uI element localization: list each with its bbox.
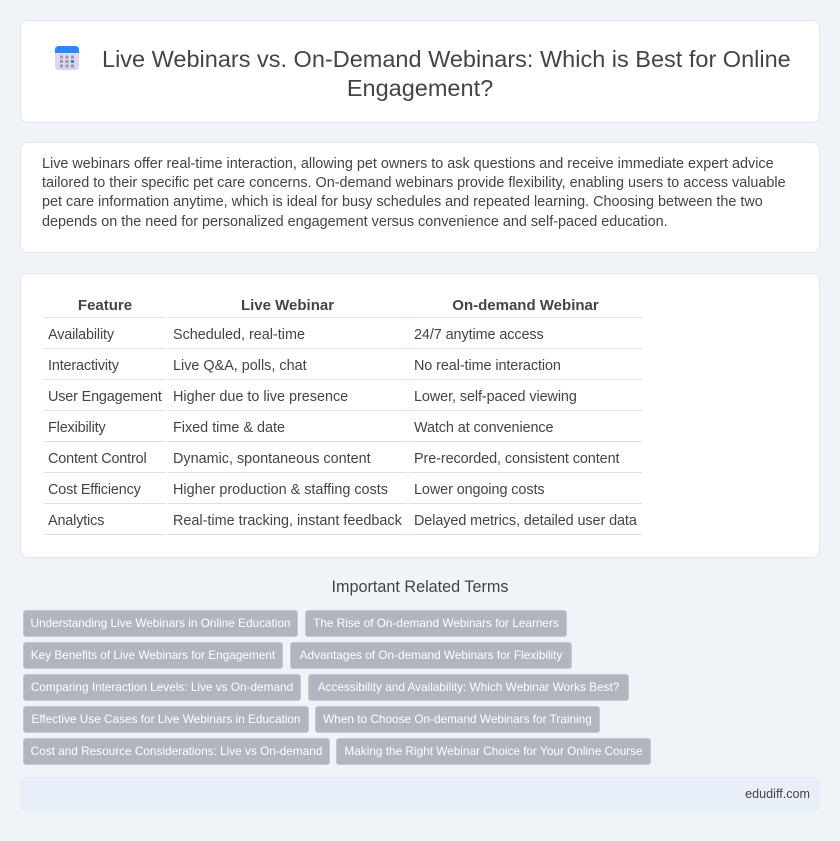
heading: important related terms: Important Related Terms (332, 578, 508, 596)
row: Availability (48, 327, 544, 343)
row: Content Control (48, 451, 620, 467)
chip: Understanding Live Webinars in Online Education (30, 616, 291, 630)
row: Flexibility (48, 420, 553, 436)
chip (336, 738, 651, 765)
row: Content Control: Content Control (48, 451, 147, 467)
row: Analytics (48, 513, 637, 529)
title (102, 46, 791, 101)
row: Analytics: Real-time tracking, instant feedback (173, 513, 402, 529)
chip: Advantages of On-demand Webinars for Flexibility (300, 648, 562, 662)
summary text: depends on the need for personalized engagement versus convenience and self-paced education. (42, 214, 668, 230)
chip (23, 642, 283, 669)
row: User Engagement (48, 389, 577, 405)
chip: Making the Right Webinar Choice for Your Online Course (344, 744, 643, 758)
row: Interactivity (48, 358, 561, 374)
row: Flexibility: Watch at convenience (414, 420, 553, 436)
row: Analytics: Analytics (48, 513, 104, 529)
table header: On-demand Webinar: On-demand Webinar (452, 297, 599, 314)
table header: Feature: Feature (78, 297, 132, 314)
row: Cost Efficiency: Cost Efficiency (48, 482, 141, 498)
row: Availability: 24/7 anytime access (414, 327, 544, 343)
icon: calendar (55, 46, 79, 70)
chip (23, 610, 298, 637)
table header: Live Webinar: Live Webinar (241, 297, 334, 314)
panel: comparison table card (20, 273, 820, 558)
row: Cost Efficiency: Higher production & staffing costs (173, 482, 388, 498)
row: User Engagement: User Engagement (48, 389, 162, 405)
summary text: pet care information anytime, which is ideal for busy schedules and repeated learning. Choosing between the two (42, 194, 763, 210)
chip (305, 610, 567, 637)
chip: Accessibility and Availability: Which Webinar Works Best? (318, 680, 619, 694)
chip: Effective Use Cases for Live Webinars in Education (31, 712, 301, 726)
summary text: Live webinars offer real-time interaction, allowing pet owners to ask questions and receive immediate expert advice (42, 156, 774, 172)
summary text (42, 156, 786, 230)
row: Flexibility: Fixed time & date (173, 420, 285, 436)
row: Interactivity: Interactivity (48, 358, 119, 374)
chip (23, 738, 330, 765)
chip: Comparing Interaction Levels: Live vs On-demand (31, 680, 293, 694)
row: Analytics: Delayed metrics, detailed user data (414, 513, 637, 529)
footer source text: edudiff.com (745, 787, 810, 801)
title: Live Webinars vs. On-Demand Webinars: Which is Best for Online (102, 46, 791, 72)
chip: The Rise of On-demand Webinars for Learners (313, 616, 559, 630)
panel: title card (20, 20, 820, 123)
row: Interactivity: No real-time interaction (414, 358, 561, 374)
row: Content Control: Dynamic, spontaneous content (173, 451, 371, 467)
chip (23, 706, 309, 733)
chip (290, 642, 572, 669)
summary text: tailored to their specific pet care concerns. On-demand webinars provide flexibility, enabling users to access valuable (42, 175, 786, 191)
panel: summary card (20, 142, 820, 253)
row: Availability: Scheduled, real-time (173, 327, 305, 343)
chip (315, 706, 600, 733)
row: Flexibility: Flexibility (48, 420, 106, 436)
row: User Engagement: Lower, self-paced viewing (414, 389, 577, 405)
chip (308, 674, 629, 701)
row: Cost Efficiency (48, 482, 544, 498)
row: Content Control: Pre-recorded, consistent content (414, 451, 619, 467)
row: Interactivity: Live Q&A, polls, chat (173, 358, 307, 374)
row: User Engagement: Higher due to live presence (173, 389, 348, 405)
title: Engagement? (347, 75, 493, 101)
row: Availability: Availability (48, 327, 114, 343)
chip: Cost and Resource Considerations: Live vs On-demand (31, 744, 322, 758)
row: Cost Efficiency: Lower ongoing costs (414, 482, 544, 498)
related term chips (23, 610, 651, 765)
chip: Key Benefits of Live Webinars for Engagement (31, 648, 275, 662)
chip (23, 674, 301, 701)
footer bar (20, 777, 820, 810)
comparison table (44, 297, 642, 535)
chip: When to Choose On-demand Webinars for Training (323, 712, 592, 726)
